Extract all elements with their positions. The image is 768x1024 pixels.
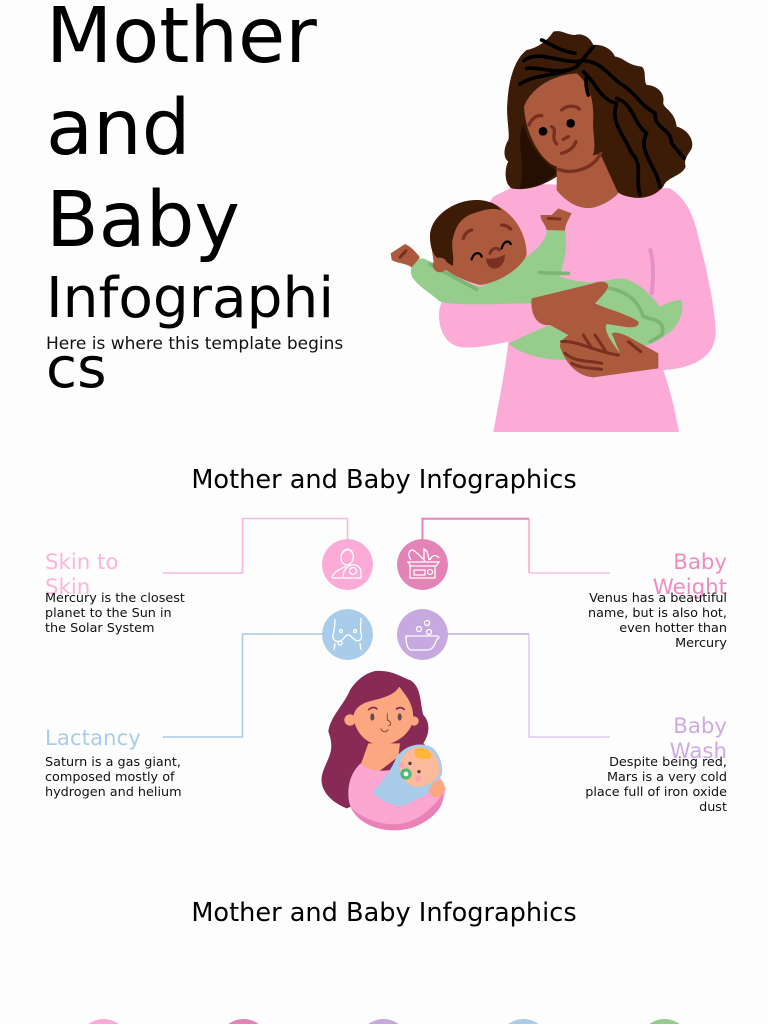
section heading 2: Mother and Baby Infographics bbox=[191, 898, 577, 928]
label: skin to skin: Skin to bbox=[45, 550, 118, 575]
title second line: Infographi bbox=[46, 266, 334, 331]
label: baby weight bbox=[653, 550, 727, 600]
label: skin to skin bbox=[45, 550, 118, 600]
text: saturn bbox=[45, 755, 182, 800]
circle: blue bbox=[498, 1019, 549, 1024]
label: lactancy: Lactancy bbox=[45, 726, 141, 751]
icon: skin to skin bbox=[322, 539, 373, 590]
text: mars: Despite being red, bbox=[609, 755, 727, 770]
label: baby weight: Baby bbox=[673, 550, 727, 575]
label: baby wash: Wash bbox=[670, 739, 727, 764]
label: skin to skin: Skin bbox=[45, 575, 90, 600]
circle: dark pink bbox=[218, 1019, 269, 1024]
subtitle: Here is where this template begins bbox=[46, 334, 343, 354]
icon: lactancy bbox=[322, 609, 373, 660]
illustration: mother holding baby bbox=[390, 31, 716, 432]
text: mars: place full of iron oxide bbox=[585, 785, 727, 800]
illustration: mother and newborn bbox=[322, 670, 446, 830]
text: saturn: hydrogen and helium bbox=[45, 785, 182, 800]
label: baby wash: Baby bbox=[673, 714, 727, 739]
text: mercury bbox=[45, 591, 185, 636]
text: venus: Venus has a beautiful bbox=[589, 591, 727, 606]
text: venus: even hotter than bbox=[619, 621, 727, 636]
text: saturn: Saturn is a gas giant, bbox=[45, 755, 181, 770]
title second line: cs bbox=[46, 336, 107, 401]
circle row bbox=[88, 1019, 680, 1024]
text: mars bbox=[585, 755, 727, 815]
circle: pink bbox=[78, 1019, 129, 1024]
text: mars: dust bbox=[699, 800, 727, 815]
text: venus: Mercury bbox=[675, 636, 727, 651]
text: mercury: planet to the Sun in bbox=[45, 606, 172, 621]
section heading 1: Mother and Baby Infographics bbox=[191, 465, 577, 495]
title: and bbox=[46, 84, 190, 173]
text: venus bbox=[588, 591, 727, 651]
circle: green bbox=[639, 1019, 690, 1024]
title: Baby bbox=[46, 176, 240, 265]
text: mercury: Mercury is the closest bbox=[45, 591, 185, 606]
text: saturn: composed mostly of bbox=[45, 770, 175, 785]
title second line bbox=[46, 266, 334, 401]
icon: baby weight bbox=[397, 539, 448, 590]
label: baby wash bbox=[670, 714, 727, 764]
circle: purple bbox=[358, 1019, 409, 1024]
label: baby weight: Weight bbox=[653, 575, 727, 600]
icon: baby wash bbox=[397, 609, 448, 660]
text: venus: name, but is also hot, bbox=[588, 606, 727, 621]
title bbox=[46, 0, 317, 265]
text: mercury: the Solar System bbox=[45, 621, 154, 636]
text: mars: Mars is a very cold bbox=[607, 770, 727, 785]
